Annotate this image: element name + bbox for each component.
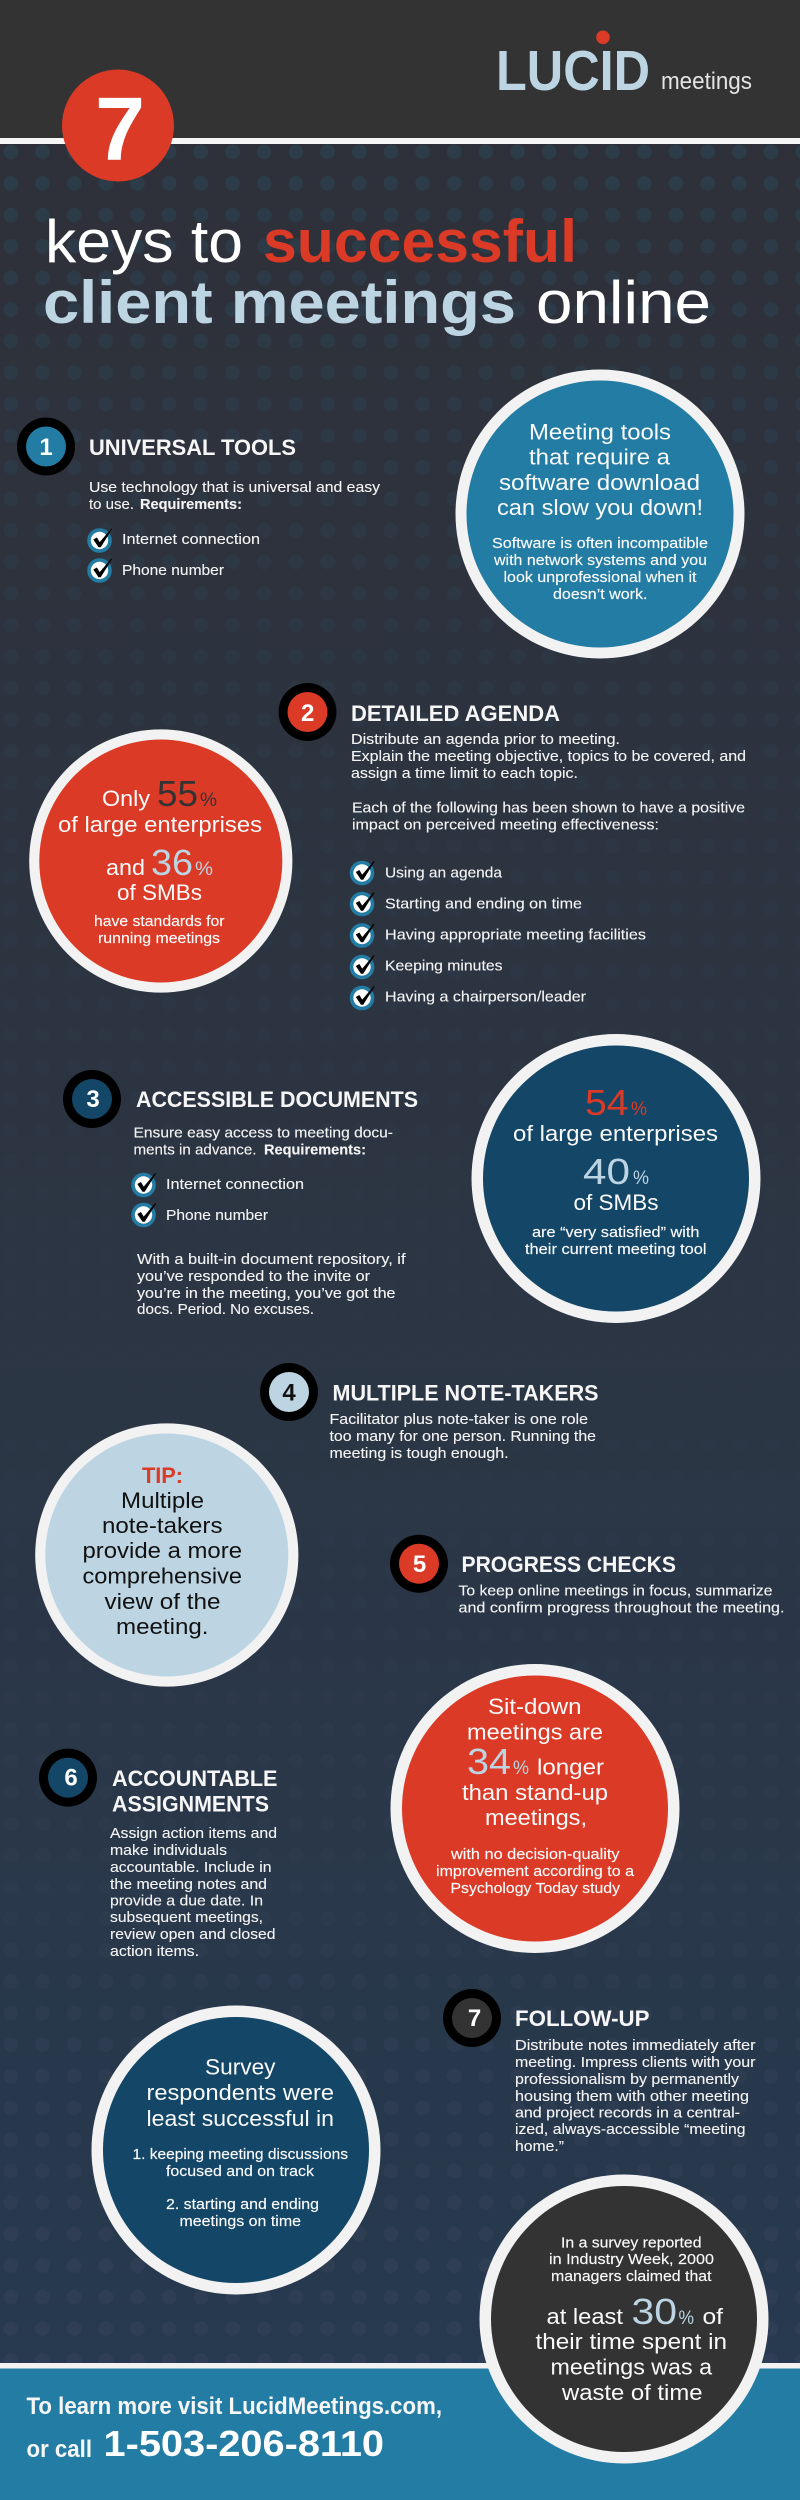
callout: sit-down meetings: meetings,	[485, 1805, 587, 1830]
callout: tip: view of the	[104, 1589, 220, 1614]
title: client meetings	[43, 269, 516, 336]
title: successful	[263, 208, 577, 275]
repository note: you’ve responded to the invite or	[137, 1269, 370, 1285]
callout: sit-down meetings: Psychology Today study	[450, 1881, 621, 1897]
step badge 6	[39, 1749, 97, 1807]
repository note: With a built-in document repository, if	[137, 1252, 407, 1268]
body text: Distribute an agenda prior to meeting.	[351, 732, 620, 748]
step badge 2: 2	[301, 700, 314, 727]
callout: tip: comprehensive	[82, 1564, 242, 1588]
panel: step 3 accessible documents	[63, 1070, 418, 1318]
body text	[458, 1584, 784, 1616]
check item: phone number	[131, 1203, 268, 1227]
heading: ACCESSIBLE DOCUMENTS	[136, 1087, 418, 1112]
badge: number 7	[62, 70, 174, 182]
body text: ized, always-accessible “meeting	[515, 2122, 746, 2138]
callout: tip: note-takers	[102, 1513, 222, 1538]
heading	[112, 1766, 278, 1816]
callout: meeting tool satisfaction: 40	[583, 1151, 630, 1192]
heading: PROGRESS CHECKS	[462, 1552, 676, 1577]
callout: meeting tool satisfaction: their current meeting tool	[525, 1242, 706, 1258]
callout: sit-down meetings: %	[513, 1758, 529, 1779]
callout: time wasted in meetings	[480, 2174, 768, 2464]
callout: software download: with network systems and you	[493, 553, 707, 569]
callout: sit-down meetings	[390, 1664, 680, 1953]
callout: meeting tool satisfaction	[472, 1034, 760, 1323]
footer band	[0, 2363, 800, 2500]
callout: tip: TIP:	[142, 1463, 183, 1488]
callout: time wasted in meetings: In a survey reported	[561, 2236, 702, 2252]
body text: Assign action items and	[110, 1826, 277, 1842]
callout: survey respondents: 1. keeping meeting discussions	[132, 2147, 348, 2163]
callout: meeting standards: have standards for	[94, 914, 225, 930]
callout: software download: look unprofessional when it	[504, 570, 696, 586]
body text: assign a time limit to each topic.	[351, 766, 578, 782]
check item: starting and ending on time: Starting and ending on time	[385, 896, 582, 912]
callout: software download	[456, 370, 744, 658]
body text: Explain the meeting objective, topics to be covered, and	[351, 749, 746, 765]
callout: software download: doesn’t work.	[553, 587, 648, 603]
badge: number 7: 7	[95, 80, 145, 180]
callout: time wasted in meetings: %	[678, 2308, 694, 2329]
callout: survey respondents: least successful in	[146, 2106, 334, 2131]
callout: sit-down meetings: with no decision-quality	[450, 1847, 620, 1863]
callout: time wasted in meetings: of	[702, 2304, 724, 2329]
panel: step 4 multiple note-takers	[260, 1363, 598, 1462]
step badge 1	[17, 418, 75, 476]
body text: impact on perceived meeting effectiveness:	[352, 818, 659, 834]
body text: Requirements:	[264, 1142, 366, 1158]
title: keys to	[45, 208, 243, 275]
callout: meeting tool satisfaction: of large enterprises	[513, 1121, 718, 1146]
body text: ments in advance.	[134, 1142, 256, 1158]
body text: and confirm progress throughout the meeting.	[458, 1600, 784, 1616]
check item: using an agenda: Using an agenda	[385, 866, 503, 882]
check item: using an agenda	[350, 861, 503, 885]
footer call to action: or call	[26, 2436, 92, 2463]
body text: Use technology that is universal and easy	[89, 480, 381, 496]
callout: software download: Software is often incompatible	[492, 536, 708, 552]
logo: Lucid Meetings	[496, 30, 752, 103]
callout: meeting standards	[29, 729, 292, 993]
heading: DETAILED AGENDA	[351, 701, 560, 726]
body text: the meeting notes and	[110, 1877, 267, 1893]
callout: meeting tool satisfaction: %	[631, 1099, 647, 1120]
callout: meeting standards: 36	[151, 842, 193, 883]
callout: meeting standards: running meetings	[98, 931, 220, 947]
callout: software download: Meeting tools	[529, 420, 671, 444]
callout: meeting standards: of SMBs	[117, 880, 202, 905]
callout: meeting standards: %	[195, 859, 213, 880]
check item: internet connection	[131, 1173, 304, 1197]
callout: survey respondents: meetings on time	[180, 2214, 301, 2230]
body text: to use.	[89, 497, 134, 513]
body text: make individuals	[110, 1843, 227, 1859]
repository note: you’re in the meeting, you’ve got the	[137, 1286, 396, 1302]
body text	[515, 2038, 756, 2155]
check item: appropriate meeting facilities	[350, 923, 646, 948]
check item: phone number	[87, 558, 224, 583]
panel: step 2 detailed agenda	[278, 683, 746, 1010]
check item: phone number: Phone number	[122, 563, 224, 579]
body text: provide a due date. In	[110, 1894, 263, 1910]
callout: time wasted in meetings: 30	[632, 2291, 677, 2332]
step badge 1: 1	[39, 434, 53, 461]
logo: Lucid Meetings: LUCID	[496, 39, 650, 103]
callout: meeting tool satisfaction: 54	[585, 1082, 628, 1123]
panel: step 7 follow-up	[443, 1989, 756, 2155]
callout: time wasted in meetings: their time spent in	[536, 2329, 727, 2354]
step badge 2	[278, 683, 336, 741]
callout: survey respondents: 2. starting and ending	[166, 2197, 319, 2213]
callout: tip: meeting.	[116, 1614, 208, 1639]
body text: Each of the following has been shown to have a positive	[352, 800, 745, 816]
body text	[351, 732, 746, 834]
callout: survey respondents: Survey	[205, 2054, 276, 2080]
body text: Ensure easy access to meeting docu-	[134, 1126, 393, 1142]
check item: phone number: Phone number	[166, 1208, 268, 1224]
body text: housing them with other meeting	[515, 2089, 749, 2105]
body text: accountable. Include in	[110, 1860, 272, 1876]
callout: sit-down meetings: Sit-down	[488, 1694, 582, 1719]
callout: survey respondents: respondents were	[146, 2080, 334, 2105]
check item: internet connection: Internet connection	[166, 1177, 304, 1193]
callout: survey respondents	[92, 2006, 380, 2294]
step badge 3: 3	[86, 1086, 100, 1113]
callout: meeting tool satisfaction: of SMBs	[574, 1190, 658, 1215]
callout: time wasted in meetings: managers claimed that	[551, 2269, 712, 2285]
callout: time wasted in meetings: in Industry Week, 2000	[549, 2252, 714, 2268]
callout: sit-down meetings: than stand-up	[462, 1780, 608, 1805]
callout: time wasted in meetings: at least	[546, 2304, 624, 2329]
check item: keeping minutes	[350, 955, 502, 979]
body text: home.”	[515, 2139, 564, 2155]
callout: sit-down meetings: longer	[537, 1754, 605, 1780]
callout: meeting standards: %	[200, 790, 217, 811]
panel: step 1 universal tools	[17, 418, 381, 583]
footer call to action: 1-503-206-8110	[104, 2423, 384, 2464]
body text	[110, 1826, 277, 1960]
body text: To keep online meetings in focus, summarize	[458, 1584, 772, 1600]
body text: too many for one person. Running the	[330, 1429, 596, 1445]
callout: sit-down meetings: 34	[467, 1741, 511, 1782]
step badge 4	[260, 1363, 318, 1421]
body text: meeting. Impress clients with your	[515, 2055, 756, 2071]
heading: UNIVERSAL TOOLS	[89, 435, 296, 460]
body text	[330, 1412, 596, 1462]
panel: step 6 accountable assignments	[39, 1749, 278, 1960]
callout: sit-down meetings: meetings are	[467, 1720, 603, 1744]
heading: FOLLOW-UP	[515, 2006, 650, 2031]
callout: meeting tool satisfaction: %	[633, 1168, 649, 1189]
callout: time wasted in meetings: meetings was a	[550, 2354, 712, 2380]
step badge 5	[390, 1535, 448, 1593]
check item: internet connection	[87, 528, 260, 553]
callout: sit-down meetings: improvement according to a	[436, 1864, 635, 1880]
body text	[134, 1126, 393, 1158]
repository note	[137, 1252, 407, 1318]
callout: software download: can slow you down!	[497, 495, 703, 520]
body text: meeting is tough enough.	[330, 1446, 508, 1462]
step badge 3	[63, 1070, 121, 1128]
callout: tip: Multiple	[121, 1488, 204, 1513]
footer call to action	[26, 2393, 442, 2464]
footer call to action: To learn more visit LucidMeetings.com,	[26, 2393, 442, 2420]
body text: Requirements:	[140, 497, 242, 513]
callout: software download: software download	[499, 470, 700, 495]
callout: tip: provide a more	[82, 1538, 242, 1563]
heading: ASSIGNMENTS	[112, 1792, 269, 1816]
check item: appropriate meeting facilities: Having appropriate meeting facilities	[385, 928, 646, 944]
callout: time wasted in meetings: waste of time	[561, 2380, 702, 2405]
body text: action items.	[110, 1944, 199, 1960]
body text: subsequent meetings,	[110, 1910, 263, 1926]
callout: survey respondents: focused and on track	[166, 2164, 315, 2180]
body text: Distribute notes immediately after	[515, 2038, 756, 2054]
body text	[89, 480, 381, 513]
callout: meeting standards: of large enterprises	[58, 812, 262, 837]
check item: starting and ending on time	[350, 892, 582, 916]
step badge 6: 6	[64, 1764, 78, 1792]
callout: tip	[35, 1423, 298, 1687]
step badge 7: 7	[468, 2005, 481, 2032]
body text: review open and closed	[110, 1927, 276, 1943]
heading: MULTIPLE NOTE-TAKERS	[332, 1380, 598, 1406]
logo: Lucid Meetings: meetings	[661, 68, 752, 95]
check item: chairperson	[350, 986, 586, 1010]
callout: meeting standards: 55	[157, 773, 198, 814]
check item: keeping minutes: Keeping minutes	[385, 958, 502, 974]
check item: chairperson: Having a chairperson/leader	[385, 990, 586, 1006]
callout: meeting standards: and	[106, 855, 145, 880]
title: online	[536, 269, 711, 336]
callout: meeting standards: Only	[102, 786, 151, 811]
panel: step 5 progress checks	[390, 1535, 784, 1616]
body text: professionalism by permanently	[515, 2072, 740, 2088]
heading: ACCOUNTABLE	[112, 1766, 278, 1791]
header band	[0, 0, 800, 144]
repository note: docs. Period. No excuses.	[137, 1302, 314, 1318]
callout: meeting tool satisfaction: are “very satisfied” with	[532, 1225, 700, 1241]
body text: and project records in a central-	[515, 2106, 740, 2122]
body text: Facilitator plus note-taker is one role	[330, 1412, 588, 1428]
step badge 4: 4	[282, 1380, 296, 1406]
step badge 7	[443, 1989, 501, 2047]
title	[43, 208, 711, 336]
check item: internet connection: Internet connection	[122, 532, 260, 548]
callout: software download: that require a	[529, 444, 671, 470]
step badge 5: 5	[413, 1551, 426, 1578]
